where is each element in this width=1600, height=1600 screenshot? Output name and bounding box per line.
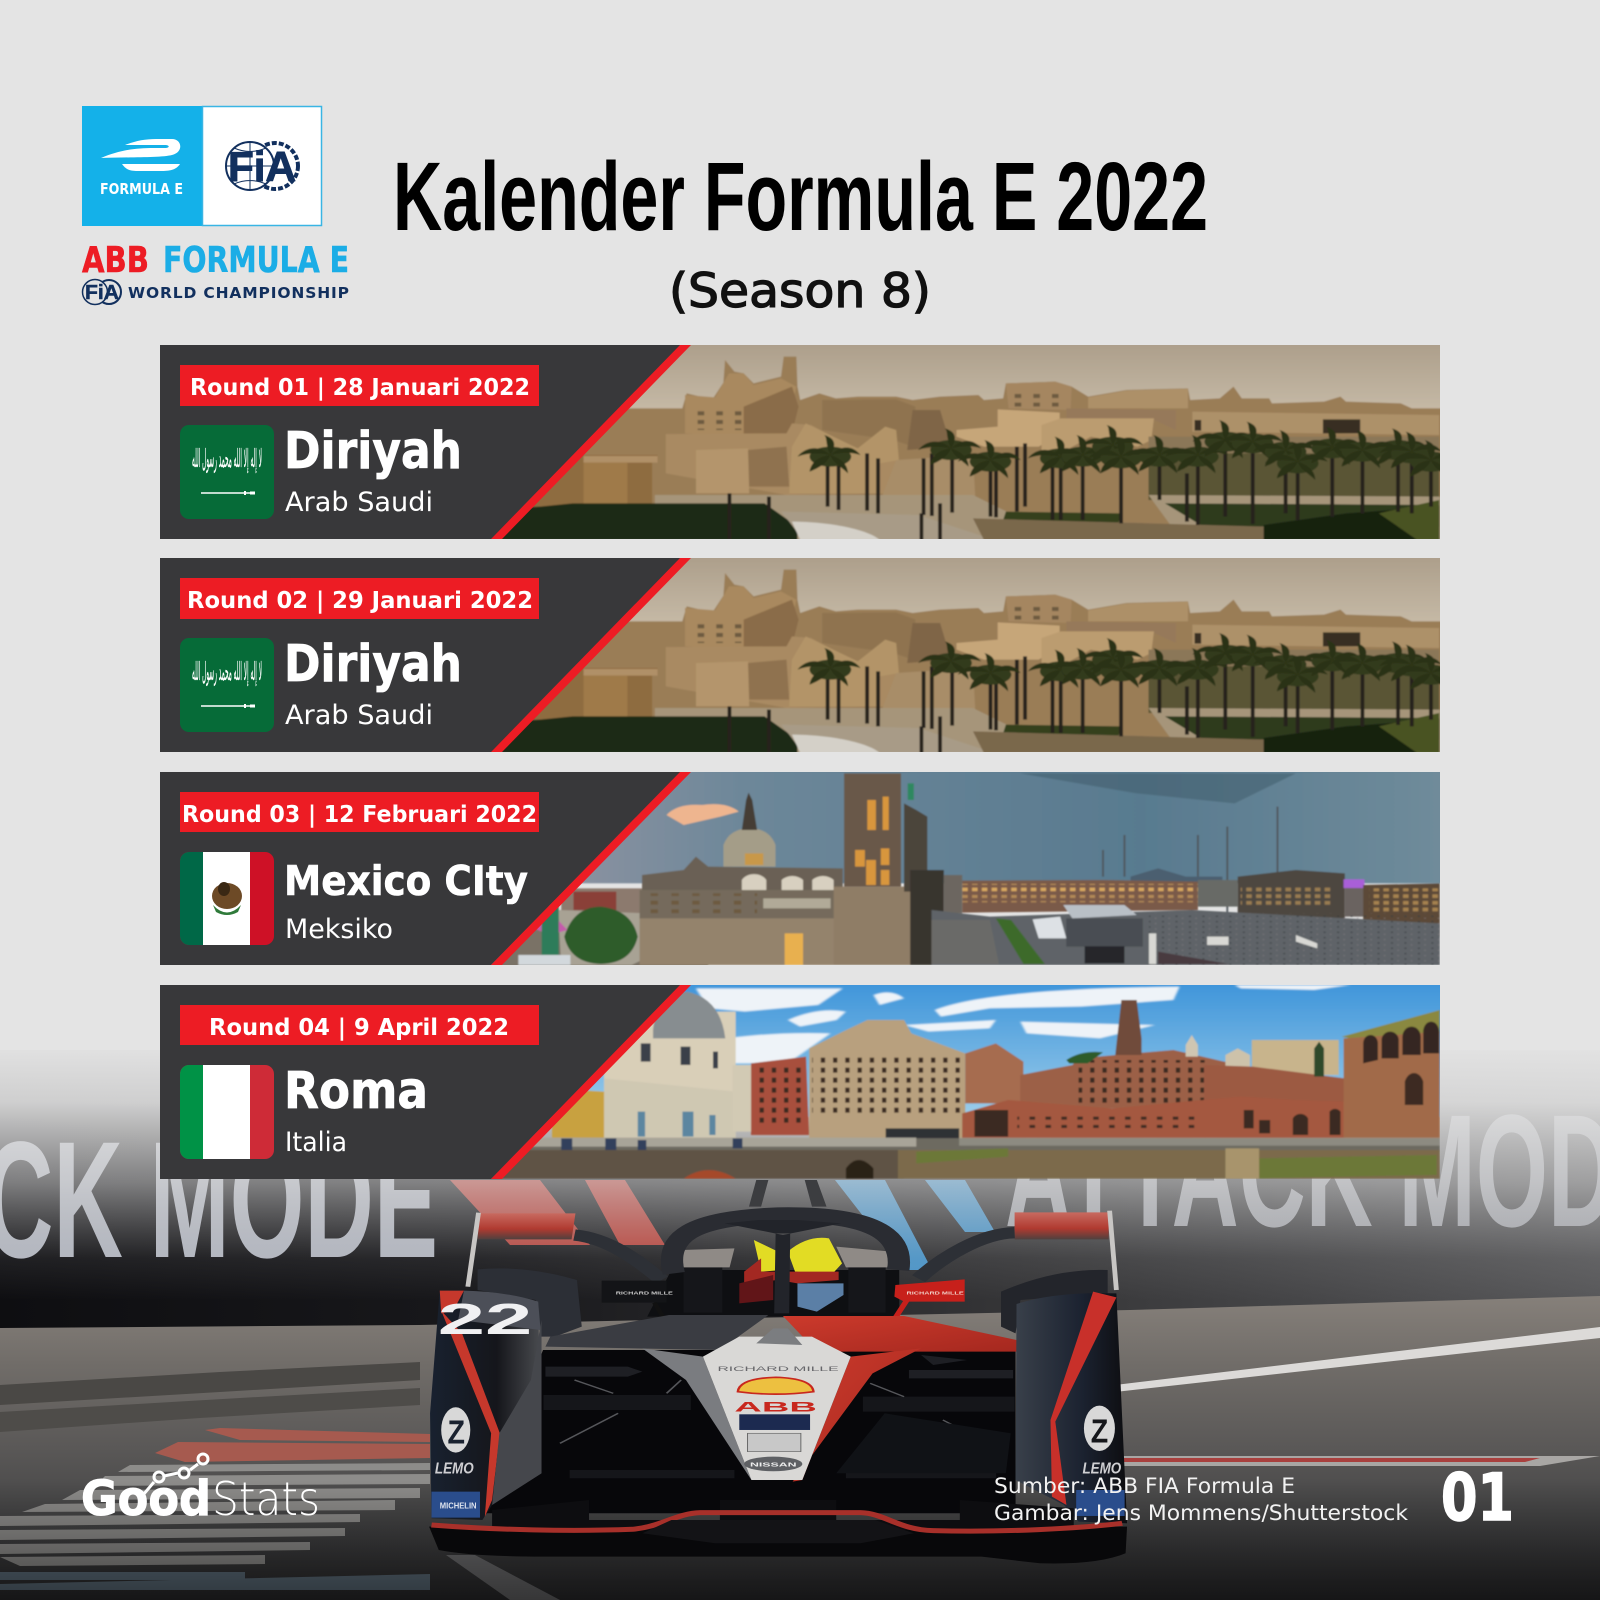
wall lettering left: CK MODE [0,1108,438,1293]
World Championship wordmark: WORLD CHAMPIONSHIP [128,284,349,302]
driver helmet [754,1238,842,1275]
date tag [180,578,539,619]
date tag: Round 01 | 28 Januari 2022 [190,375,530,401]
panel: round 02 Diriyah: لا إله إلا الله محمد رسول الله [192,657,262,687]
chart mark [143,1454,208,1495]
city name: Diriyah [284,635,462,694]
dark label panel [160,558,681,752]
blue chevrons on wall [835,1180,995,1270]
car body top [545,1315,768,1350]
left front wheel: MICHELIN [440,1502,477,1511]
date tag [180,1005,539,1045]
car nose: NISSAN [750,1462,796,1468]
right front wheel: Z [1091,1412,1108,1450]
photo: Diriyah [491,345,1440,539]
FIA tile [202,106,322,226]
red track marking [155,1428,430,1462]
car nose: ABB [734,1399,817,1415]
panel: round 01 Diriyah [160,340,1461,540]
front wing [432,1500,1122,1543]
red chevrons on wall [450,1180,665,1245]
left front wheel: LEMO [435,1460,474,1477]
country name: Arab Saudi [285,487,433,518]
dark label panel [160,772,681,965]
panel: round 03 Mexico City [160,770,1443,967]
mirrors: RICHARD MILLE [907,1290,964,1296]
background photo: track and wall [0,1040,1600,1600]
ABB mark: ABB [82,240,149,281]
Formula E tile: FORMULA E [100,180,183,198]
rear wing right [919,1211,1116,1290]
Formula E tile [82,106,202,226]
flag: Saudi Arabia [180,425,274,519]
mirrors: RICHARD MILLE [616,1291,673,1296]
rear wing left [468,1213,662,1287]
subtitle: (Season 8) [669,264,931,319]
country name: Meksiko [285,914,393,945]
dark label panel [160,345,681,539]
date tag [180,792,539,832]
photo: Diriyah second [491,558,1440,752]
GoodStats logo [81,1454,320,1527]
image credit: Gambar: Jens Mommens/Shutterstock [994,1501,1409,1525]
white track line [1115,1327,1600,1392]
date tag: Round 04 | 9 April 2022 [209,1015,509,1041]
flag: Italy [180,1065,274,1159]
dark label panel [160,985,681,1179]
red diagonal stripe [491,345,691,539]
car nose: RICHARD MILLE [717,1365,840,1373]
flag: Saudi Arabia [180,638,274,732]
car nose [642,1328,921,1482]
date tag [180,365,539,406]
page number: 01 [1441,1461,1514,1536]
right front wheel: LEMO [1082,1460,1122,1477]
panel: round 02 Diriyah [160,553,1461,753]
mirrors [602,1279,965,1337]
red diagonal stripe [491,985,691,1179]
left front wheel: 22 [438,1296,532,1344]
city name: Roma [284,1062,428,1121]
red diagonal stripe [491,558,691,752]
left front wheel [430,1290,542,1520]
date tag: Round 02 | 29 Januari 2022 [187,588,533,614]
small FIA badge: FiA [85,282,119,304]
race car photo illustration [429,1180,1127,1564]
red diagonal stripe [491,772,691,965]
foreground track line [446,1555,560,1600]
right front wheel [1016,1292,1127,1523]
wordmark Good: Good [81,1471,211,1527]
wordmark Stats: Stats [212,1472,320,1526]
photo: Mexico City [439,770,1443,967]
engine and chassis [482,1350,1016,1513]
rear support and shadow [429,1527,1127,1564]
photo: Roma [439,983,1443,1179]
panel: round 04 Roma [160,983,1443,1179]
red and white kerb line [1112,1456,1600,1466]
flag: Mexico [180,852,274,945]
city name: Diriyah [284,422,462,481]
title: Kalender Formula E 2022 [393,142,1208,251]
FORMULA E wordmark: FORMULA E [163,240,349,281]
country name: Arab Saudi [285,700,433,731]
city name: Mexico CIty [284,857,528,905]
chequered track marking [0,1463,430,1566]
cockpit [647,1238,899,1317]
source credit: Sumber: ABB FIA Formula E [994,1474,1295,1498]
panel: round 01 Diriyah: لا إله إلا الله محمد رسول الله [192,444,262,474]
left front wheel: Z [448,1413,465,1451]
rear tyres [478,1268,582,1337]
country name: Italia [285,1127,347,1158]
date tag: Round 03 | 12 Februari 2022 [182,802,537,828]
logo: Formula E and FIA lockup [82,106,349,304]
FIA tile: FiA [228,143,296,190]
halo [672,1215,899,1273]
